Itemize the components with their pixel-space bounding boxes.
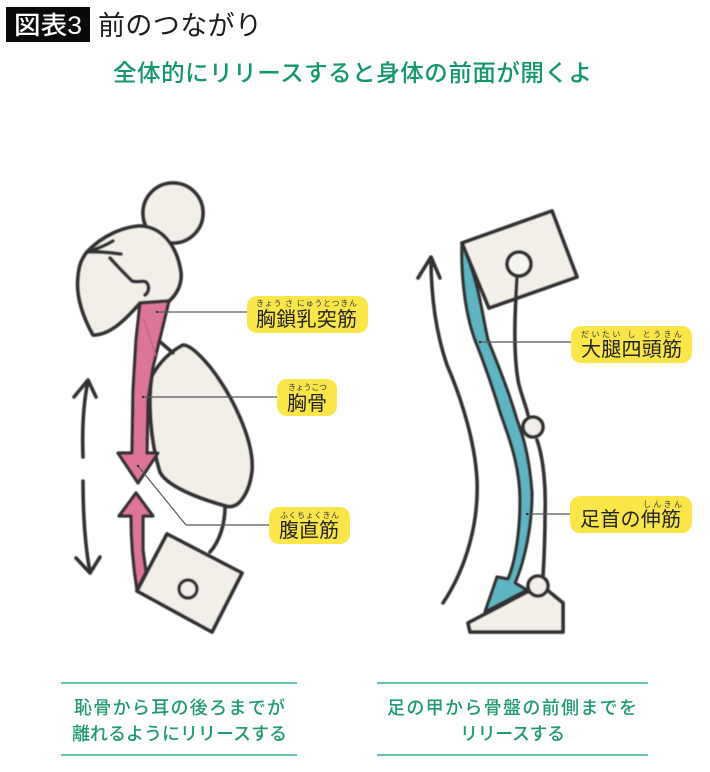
- hip joint: [507, 252, 531, 276]
- caption: right: 足の甲から骨盤の前側までを: [387, 698, 637, 718]
- thigh back line: [515, 277, 528, 415]
- label: 大腿四頭筋: 大腿四頭筋: [581, 338, 682, 361]
- label: 足首の伸筋: 足首の伸筋: [580, 508, 681, 531]
- title: figure badge: [6, 7, 90, 42]
- arrow: down: [76, 481, 100, 573]
- figure: left body side view: [74, 183, 252, 632]
- pelvis: [462, 211, 577, 308]
- label: 胸骨: 胸骨: [287, 392, 327, 415]
- face line: [87, 241, 149, 295]
- label: 胸骨: [142, 379, 337, 416]
- torso: [150, 345, 252, 507]
- label: 大腿四頭筋: [479, 326, 692, 363]
- title: figure badge: 図表3: [14, 12, 82, 40]
- title: heading: 前のつながり: [98, 11, 262, 41]
- caption: left: 恥骨から耳の後ろまでが: [74, 697, 285, 718]
- caption: left: 離れるようにリリースする: [72, 724, 287, 744]
- neck line: [158, 340, 173, 353]
- ankle joint: [528, 576, 548, 596]
- muscle: rectus abdominis arrow: [119, 493, 153, 590]
- label: 腹直筋: [137, 465, 350, 544]
- pelvis: [137, 534, 242, 632]
- label: 大腿四頭筋: だいたい し とうきん: [581, 330, 682, 339]
- caption: right: リリースする: [460, 724, 565, 744]
- label: 足首の伸筋: [526, 496, 692, 533]
- label: 足首の伸筋: しんきん: [643, 500, 682, 509]
- foot: [468, 590, 563, 632]
- muscle: sternocleidomastoid and upper arrow: [118, 301, 169, 483]
- caption: left: [61, 683, 297, 755]
- subtitle: 全体的にリリースすると身体の前面が開くよ: [113, 60, 592, 86]
- head shape: [78, 226, 181, 335]
- label: 胸骨: きょうこつ: [288, 383, 327, 392]
- caption: right: [377, 683, 648, 755]
- teal muscle arrow: [462, 243, 532, 612]
- shin back line: [537, 440, 545, 576]
- belly line: [210, 507, 225, 552]
- icon: head bun: [143, 183, 203, 243]
- knee joint: [523, 417, 543, 437]
- hip joint: [179, 580, 197, 598]
- sternum overlap line: [143, 318, 156, 356]
- label: 胸鎖乳突筋: [156, 296, 368, 333]
- arrow: long up: [418, 257, 477, 603]
- label: 胸鎖乳突筋: きょう さ にゅうとつきん: [256, 299, 357, 308]
- figure: right leg side view: [418, 211, 577, 632]
- label: 腹直筋: 腹直筋: [279, 519, 339, 542]
- arrow: up: [74, 380, 96, 457]
- label: 胸鎖乳突筋: 胸鎖乳突筋: [256, 308, 357, 331]
- label: 腹直筋: ふくちょくきん: [280, 511, 339, 520]
